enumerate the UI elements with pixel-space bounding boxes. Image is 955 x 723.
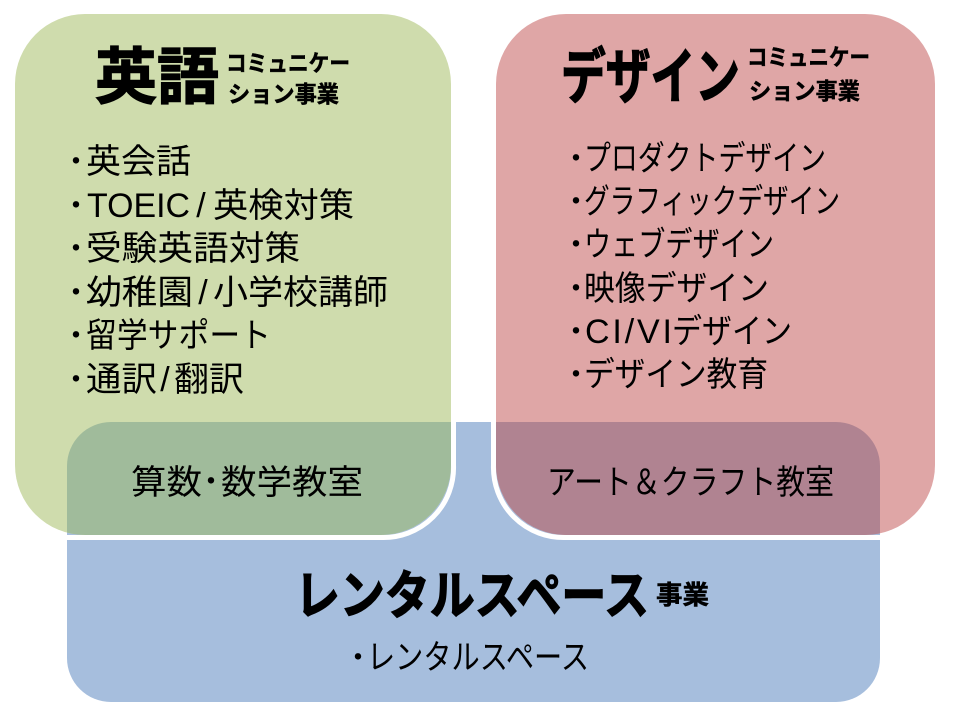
list: English services: 翻訳 (174, 361, 244, 399)
subheading: design communication business: ション事業 (749, 78, 860, 104)
list: design services: ・ (561, 186, 591, 219)
panel: English communication business (15, 14, 454, 538)
list: English services: 幼稚園 (86, 274, 193, 312)
subheading: design communication business: コミュニケー (747, 44, 870, 70)
list: English services: ・ (61, 190, 91, 223)
list: rental space: レンタルスペース (367, 639, 589, 677)
list: design services: 映像デザイン (584, 270, 769, 308)
list: design services: CI/VI (585, 313, 672, 351)
list: design services: プロダクトデザイン (584, 140, 826, 178)
list: English services: ・ (61, 277, 91, 310)
heading: rental space: レンタルスペース (295, 568, 649, 626)
list: design services: ・ (561, 273, 591, 306)
panel: rental space business (67, 422, 880, 702)
list: English services: ・ (61, 364, 91, 397)
subheading: English communication business: コミュニケー (226, 50, 350, 76)
list: English services: / (196, 187, 206, 225)
list: design services: ・ (561, 229, 591, 262)
list: design services: デザイン教育 (584, 356, 768, 394)
list: design services: ウェブデザイン (584, 226, 774, 264)
list: English services: ・ (61, 233, 91, 266)
list: design services: デザイン (672, 313, 792, 351)
label: math classroom: 算数 (131, 464, 202, 502)
list: English services: TOEIC (87, 187, 190, 225)
list: English services: / (198, 274, 208, 312)
subheading: design communication business (747, 44, 870, 104)
list: English services: ・ (61, 320, 91, 353)
list: design services: ・ (561, 316, 591, 349)
label: math classroom: ・ (196, 466, 226, 499)
list: English services (61, 143, 388, 399)
heading: English: 英語 (95, 43, 219, 111)
label: art and craft classroom: アート＆クラフト教室 (547, 464, 834, 502)
subheading: English communication business (226, 50, 350, 107)
label: math classroom: 数学教室 (221, 464, 363, 502)
list: English services: 英検対策 (213, 187, 354, 225)
list: design services: ・ (561, 143, 591, 176)
list: rental space: ・ (343, 642, 373, 675)
list: English services: 小学校講師 (213, 274, 388, 312)
list: English services: 留学サポート (86, 317, 271, 355)
subheading: English communication business: ション事業 (228, 81, 339, 107)
overlap panel: math classroom (67, 422, 451, 535)
panel: design communication business (493, 14, 935, 538)
subheading: business: 事業 (656, 580, 709, 610)
list: English services: 受験英語対策 (86, 230, 300, 268)
list: design services: ・ (561, 359, 591, 392)
list: English services: / (160, 361, 170, 399)
list: design services: グラフィックデザイン (584, 183, 840, 221)
label: math classroom (131, 464, 363, 502)
heading: design: デザイン (561, 44, 740, 111)
list: design services (561, 140, 840, 394)
list: English services: ・ (61, 146, 91, 179)
list: English services: 英会話 (86, 143, 191, 181)
list: English services: 通訳 (86, 361, 157, 399)
